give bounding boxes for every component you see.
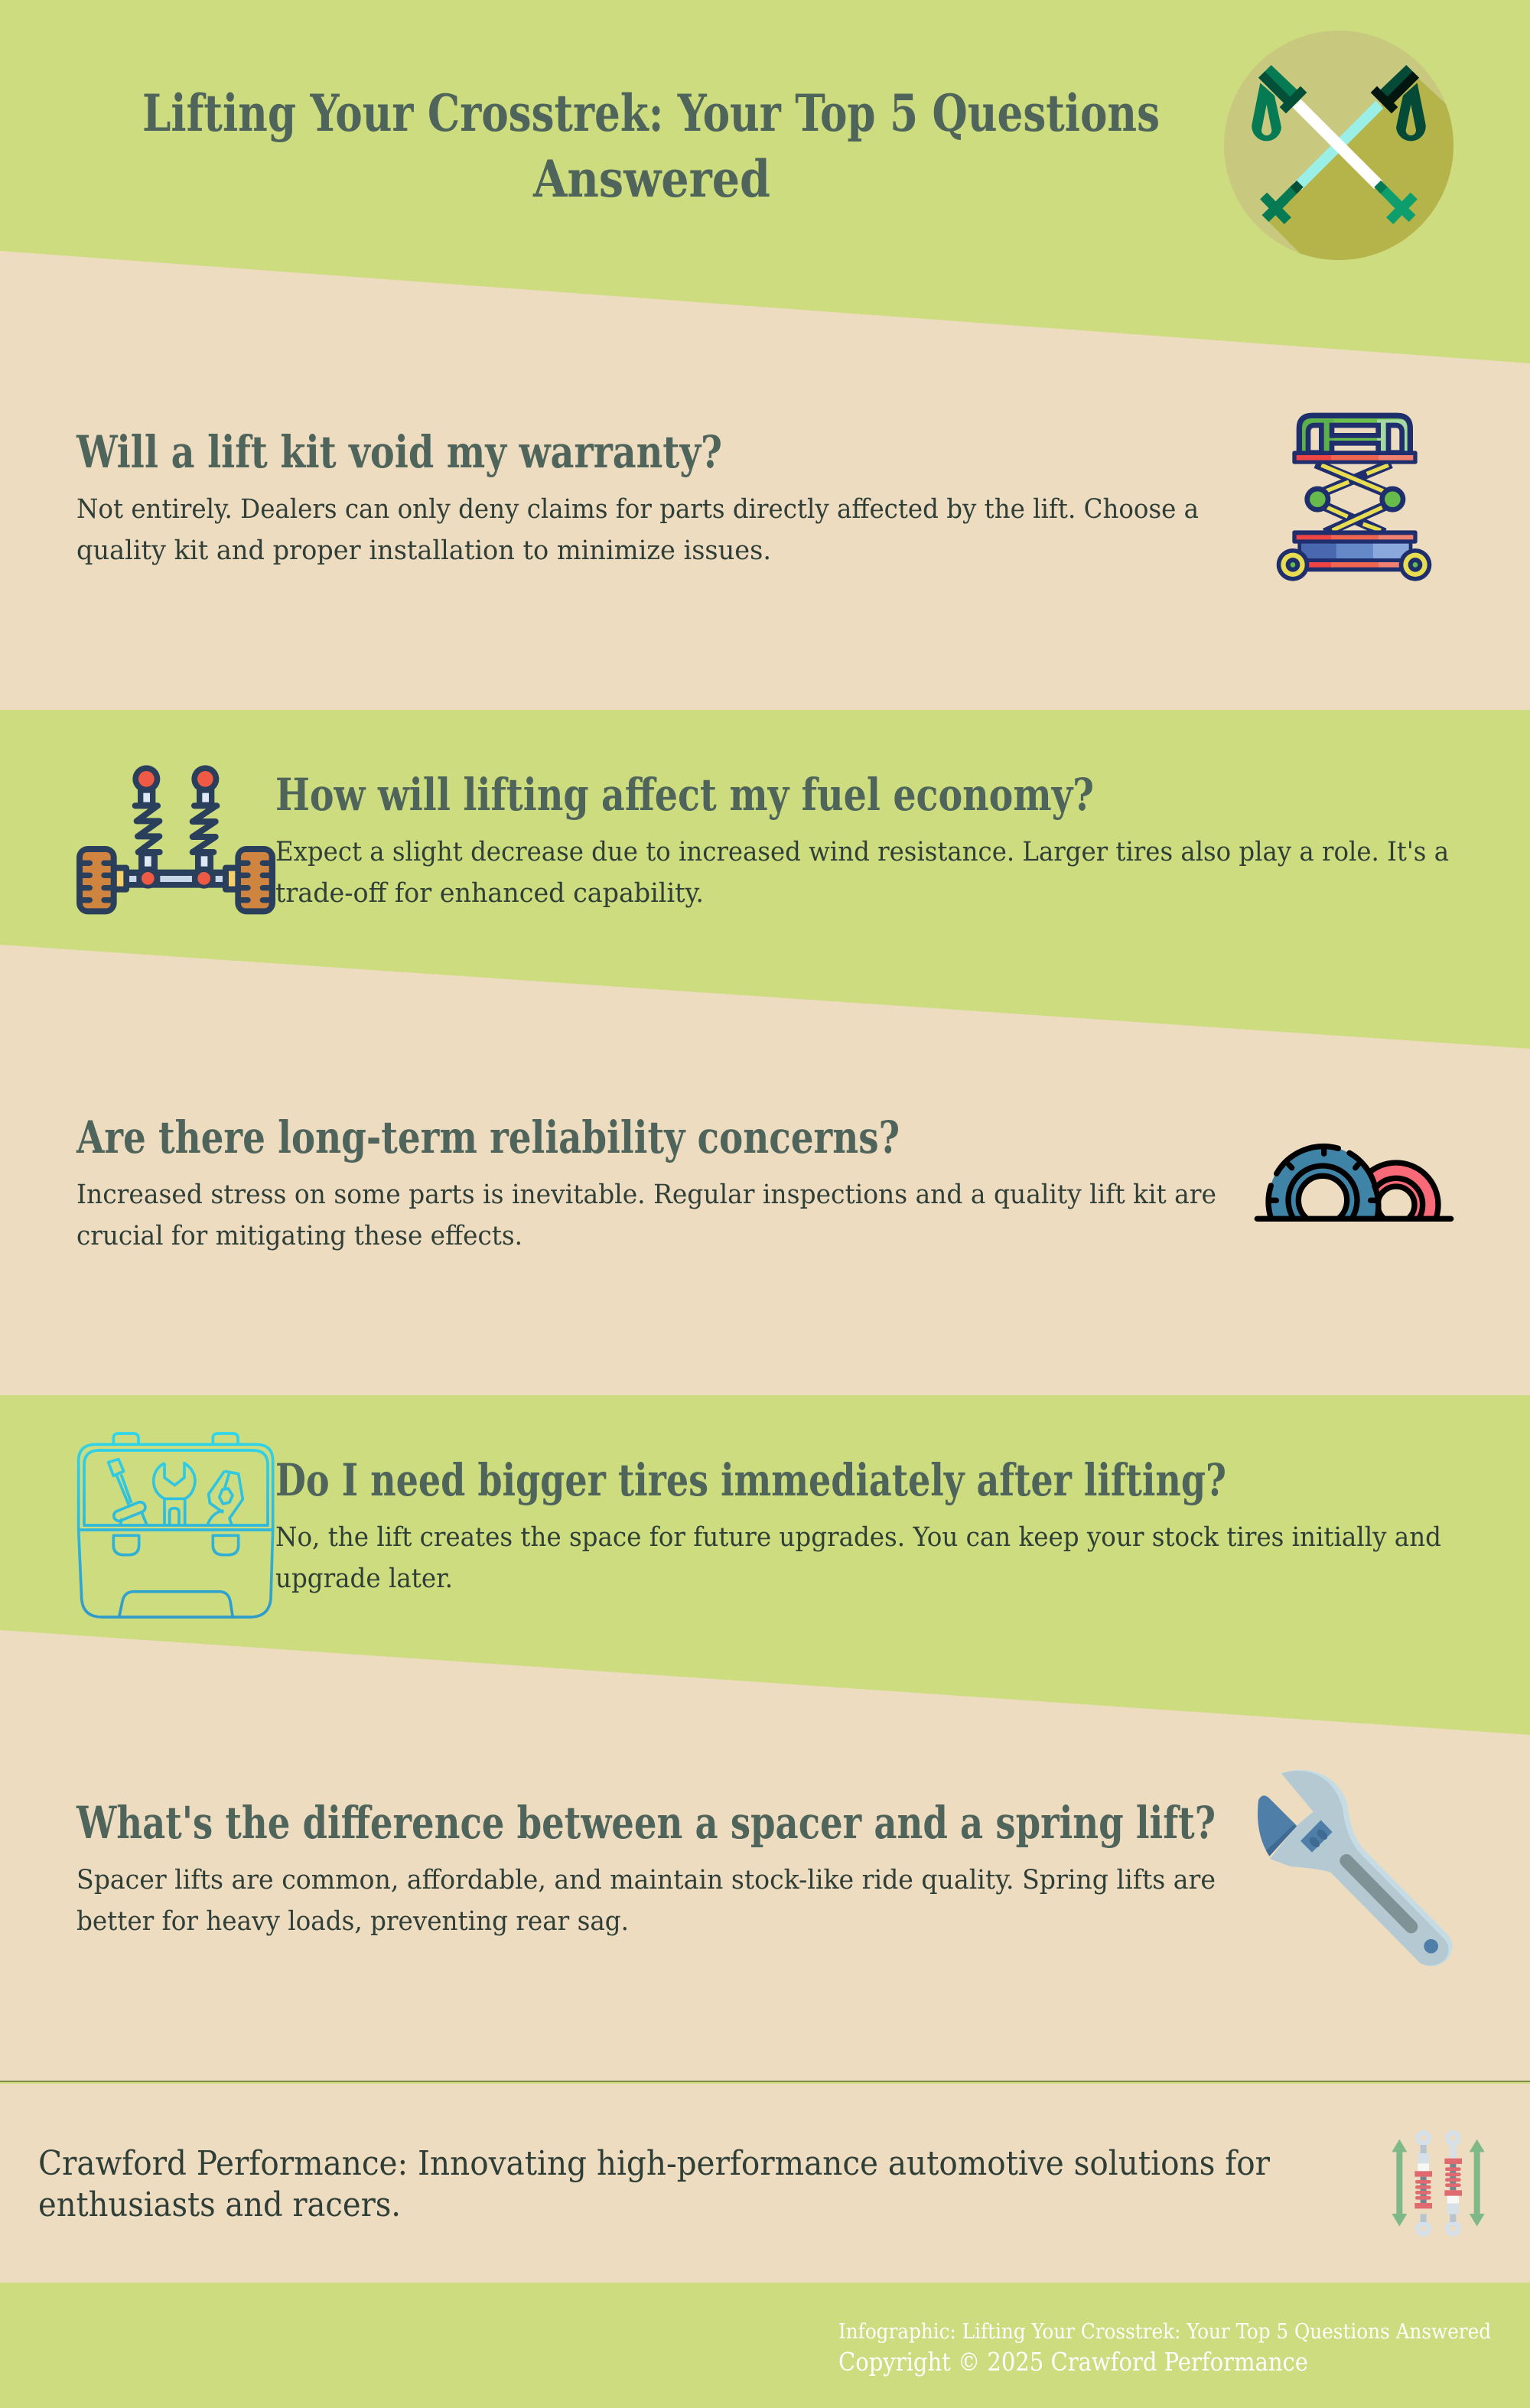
panel: spacer vs spring question <box>76 1770 1452 1966</box>
text: infographic credit: Infographic: Lifting Your Crosstrek: Your Top 5 Questions Answered <box>838 2320 1491 2344</box>
text: warranty answer <box>76 494 1199 566</box>
text: fuel economy answer: Expect a slight decrease due to increased wind resistance. Larger tires also play a role. It's a <box>275 837 1449 867</box>
text: company description: enthusiasts and racers. <box>38 2185 401 2224</box>
text: company description: Crawford Performance: Innovating high-performance automotive solutions for <box>38 2144 1270 2183</box>
text: spacer vs spring answer: better for heavy loads, preventing rear sag. <box>76 1906 629 1937</box>
text: warranty answer: quality kit and proper installation to minimize issues. <box>76 535 771 566</box>
text: reliability answer <box>76 1180 1216 1251</box>
divider line <box>0 2081 1530 2084</box>
heading: bigger tires: Do I need bigger tires immediately after lifting? <box>275 1454 1226 1506</box>
icon: crossed tools badge <box>1224 31 1454 260</box>
panel: fuel economy question <box>0 710 1530 1049</box>
text: fuel economy answer: trade-off for enhanced capability. <box>275 878 704 909</box>
text: bigger tires answer: No, the lift creates the space for future upgrades. You can keep your stock tires initially and <box>275 1522 1441 1553</box>
panel: reliability question <box>76 1111 1451 1254</box>
heading: reliability: Are there long-term reliability concerns? <box>76 1111 900 1163</box>
text: bigger tires answer: upgrade later. <box>275 1564 453 1594</box>
icon: coilover shocks with arrows <box>1392 2133 1485 2234</box>
icon: adjustable wrench <box>1258 1770 1452 1966</box>
panel: bigger tires question <box>0 1395 1530 1735</box>
icon: toolbox <box>79 1433 273 1617</box>
panel: company blurb <box>38 2133 1485 2234</box>
text: spacer vs spring answer: Spacer lifts are common, affordable, and maintain stock-like ride quality. Spring lifts are <box>76 1865 1216 1895</box>
panel: footer <box>0 2283 1530 2408</box>
title: Answered <box>532 149 770 209</box>
icon: suspension axle <box>76 765 275 914</box>
panel: header <box>0 0 1530 363</box>
title: Lifting Your Crosstrek: Your Top 5 Questions <box>142 83 1160 143</box>
heading: warranty: Will a lift kit void my warranty? <box>76 426 722 478</box>
heading: spacer vs spring: What's the difference between a spacer and a spring lift? <box>76 1797 1216 1849</box>
text: fuel economy answer <box>275 837 1449 909</box>
text: reliability answer: Increased stress on some parts is inevitable. Regular inspections and a quality lift kit are <box>76 1180 1216 1210</box>
text: reliability answer: crucial for mitigating these effects. <box>76 1221 522 1251</box>
heading: fuel economy: How will lifting affect my fuel economy? <box>275 769 1094 821</box>
text: copyright: Copyright © 2025 Crawford Performance <box>838 2347 1308 2377</box>
text: company description <box>38 2144 1270 2224</box>
text: spacer vs spring answer <box>76 1865 1216 1937</box>
title <box>142 83 1160 209</box>
icon: two tires <box>1255 1143 1454 1222</box>
text: bigger tires answer <box>275 1522 1441 1594</box>
icon: scissor lift <box>1277 415 1431 581</box>
text: warranty answer: Not entirely. Dealers can only deny claims for parts directly affected by the lift. Choose a <box>76 494 1199 525</box>
panel: warranty question <box>76 415 1431 581</box>
